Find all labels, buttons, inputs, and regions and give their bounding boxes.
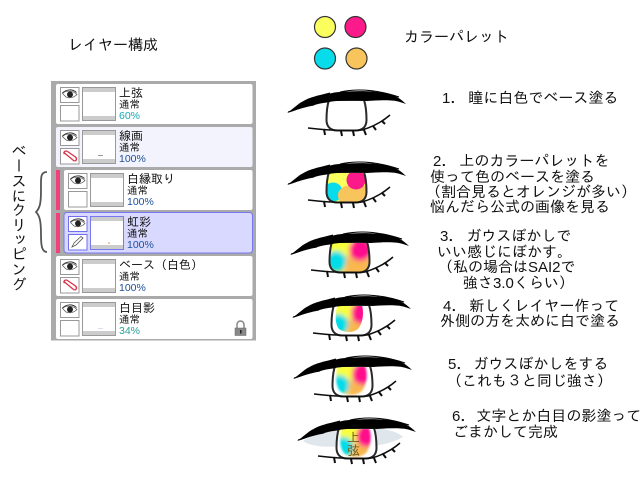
step 5 text: [447, 356, 612, 390]
layer row: 白縁取り (clipped): 通常: [127, 185, 148, 197]
step 5 text: （これも３と同じ強さ）: [447, 373, 612, 390]
layer row: 白縁取り (clipped): 100%: [127, 196, 154, 208]
layer row: 白目影: 通常: [119, 314, 140, 326]
eye 1: white base: [287, 90, 406, 136]
step 2 text: 使って色のベースを塗る: [430, 169, 595, 186]
step 4 text: 4．新しくレイヤー作って: [443, 298, 619, 315]
step 3 text: いい感じにぼかす。: [437, 244, 572, 261]
layer row: 線画: 通常: [119, 142, 140, 154]
step 6 text: ごまかして完成: [453, 424, 558, 441]
layer row: ベース（白色）: 通常: [119, 271, 140, 283]
vertical label: base clipping: ベースにクリッピング: [10, 143, 26, 291]
color palette swatches: [314, 16, 367, 69]
eye 2: flat colours: [287, 162, 406, 208]
brace: [36, 172, 47, 252]
step 2 text: 悩んだら公式の画像を見る: [430, 199, 610, 216]
palette heading: カラーパレット: [404, 29, 509, 46]
step 2 text: 2．上のカラーパレットを: [433, 153, 609, 170]
layer row: 上弦: 通常: [119, 99, 140, 111]
eye 6: finished eye: [297, 418, 416, 464]
step 6 text: 6．文字とか白目の影塗って: [452, 408, 640, 425]
layer row: 白縁取り (clipped): [56, 170, 252, 210]
step 1 text: 1．瞳に白色でベース塗る: [442, 90, 618, 107]
layer row: 白目影: 34%: [119, 325, 140, 337]
title: layer structure: レイヤー構成: [68, 37, 158, 54]
step 5 text: 5．ガウスぼかしをする: [448, 356, 608, 373]
eye 4: white outer edge: [292, 295, 411, 341]
layer row: 虹彩 (selected): [56, 212, 252, 253]
iris characters: [347, 430, 360, 458]
layer row: 線画: 100%: [119, 153, 146, 165]
layer row: 上弦: [56, 84, 252, 124]
layer row: ベース（白色）: [56, 256, 252, 296]
layer row: 虹彩 (selected): 100%: [127, 239, 154, 251]
layer row: ベース（白色）: 100%: [119, 282, 146, 294]
step 6 text: [452, 408, 640, 441]
layer row: 上弦: 60%: [119, 110, 140, 122]
eye 3: gaussian blur: [290, 232, 409, 278]
step 3 text: （私の場合はSAI2で: [438, 259, 576, 276]
layer row: 白目影: [56, 299, 252, 339]
layer row: 白目影: 白目影: [119, 301, 155, 315]
layer row: 上弦: 上弦: [119, 86, 143, 100]
step 4 text: 外側の方を太めに白で塗る: [440, 313, 620, 330]
step 3 text: [437, 228, 576, 292]
eye 5: second blur: [293, 356, 412, 402]
step 4 text: [440, 298, 620, 330]
step 3 text: 強さ3.0くらい）: [463, 275, 574, 292]
step 3 text: 3．ガウスぼかしで: [440, 228, 571, 245]
step 2 text: （割合見るとオレンジが多い）: [426, 184, 636, 201]
iris characters: 上: [347, 430, 360, 445]
layer row: 虹彩 (selected): 虹彩: [127, 215, 151, 229]
iris characters: 弦: [347, 443, 360, 458]
layer row: 線画: [56, 127, 252, 167]
layer panel: [51, 81, 256, 340]
step 2 text: [426, 153, 636, 216]
layer row: 虹彩 (selected): 通常: [127, 228, 148, 240]
layer row: 線画: 線画: [119, 129, 143, 143]
layer row: ベース（白色）: ベース（白色）: [119, 258, 203, 272]
icon: lock: [235, 321, 246, 336]
layer row: 白縁取り (clipped): 白縁取り: [127, 172, 175, 186]
